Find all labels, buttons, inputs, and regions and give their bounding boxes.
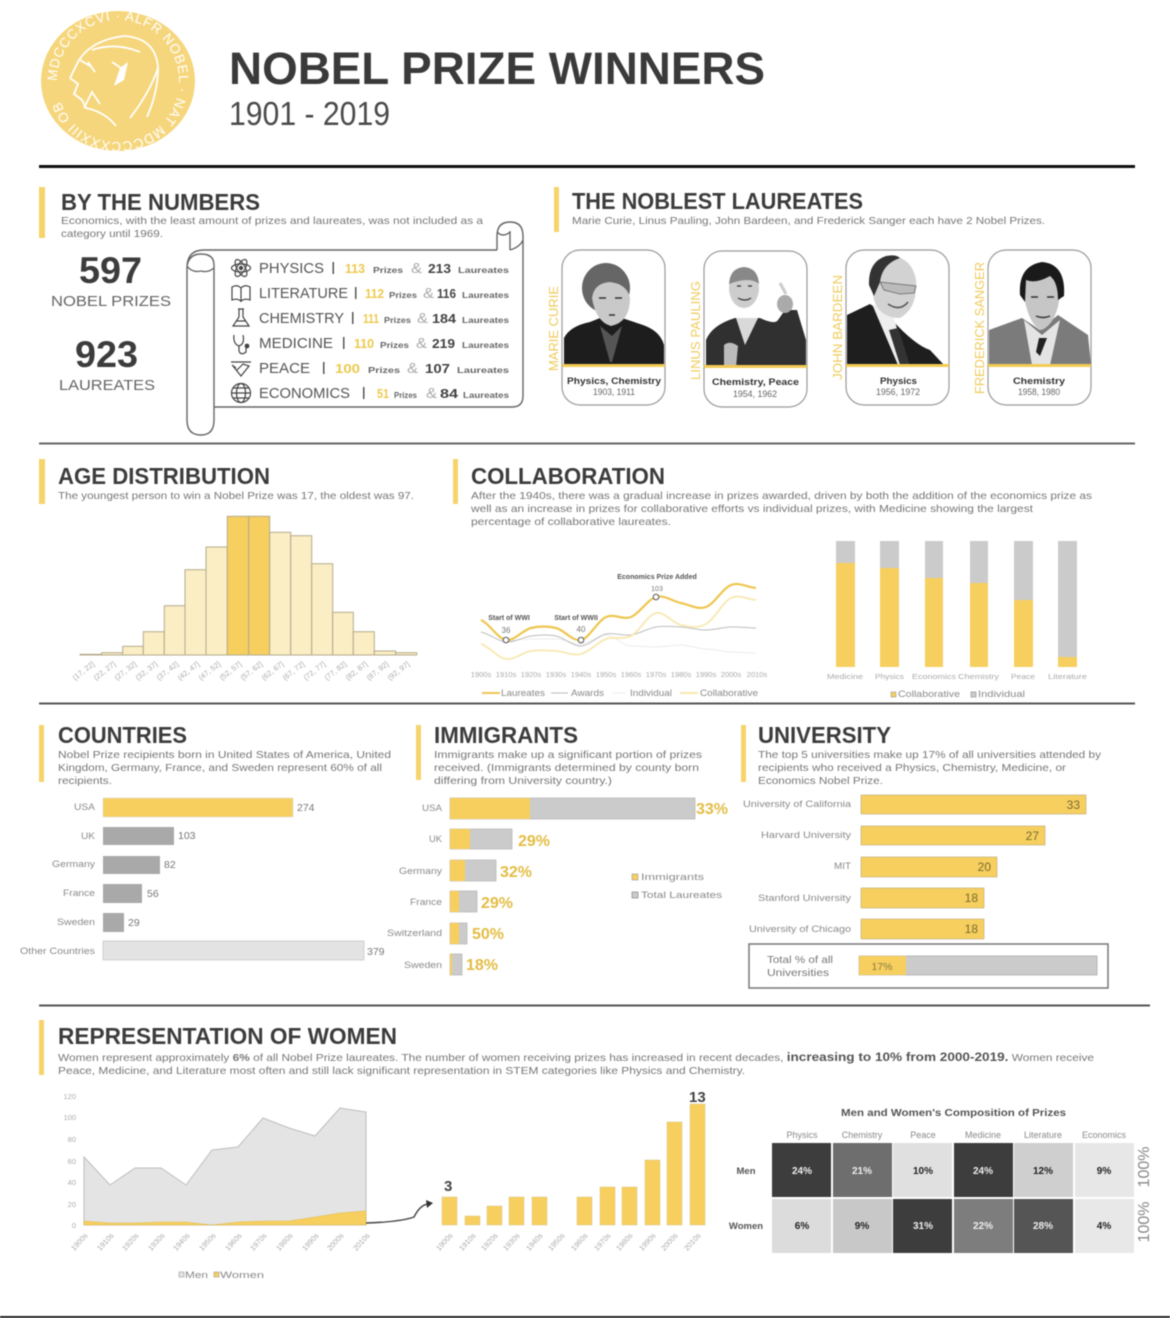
stat: 923 laureates bbox=[59, 334, 155, 394]
bar chart: universities: 18 bbox=[965, 891, 978, 905]
stacked bar chart bbox=[827, 541, 1087, 681]
arrow: area chart to bar chart bbox=[366, 1200, 433, 1223]
row: economics: & bbox=[426, 385, 437, 402]
heatmap: composition of prizes: 24% bbox=[973, 1166, 993, 1177]
stat: 597 nobel prizes: 597 bbox=[79, 250, 142, 291]
area chart: men and women by decade: 1920s bbox=[120, 1231, 141, 1253]
heatmap: composition of prizes: Physics bbox=[786, 1130, 818, 1140]
histogram: (47, 52] bbox=[197, 659, 222, 682]
line chart: 103 bbox=[651, 586, 663, 593]
row: chemistry: & bbox=[417, 310, 428, 327]
stat: 597 nobel prizes bbox=[51, 250, 171, 310]
stacked bar chart: immigrants: Sweden bbox=[404, 960, 442, 970]
category rows bbox=[231, 258, 509, 402]
legend: line chart: Laureates bbox=[501, 688, 546, 698]
heatmap: composition of prizes bbox=[729, 1108, 1153, 1253]
stacked bar chart: Medicine bbox=[827, 672, 863, 681]
histogram: (42, 47] bbox=[176, 659, 201, 682]
bar chart: countries: 103 bbox=[178, 830, 196, 842]
legend: men and women: Men bbox=[185, 1270, 208, 1280]
bar chart: women by decade: 2000s bbox=[659, 1231, 680, 1253]
heatmap: composition of prizes: 22% bbox=[973, 1221, 993, 1232]
row: peace: 107 bbox=[425, 361, 450, 376]
bar chart: countries: France bbox=[63, 888, 95, 898]
area chart: men and women by decade: 100 bbox=[63, 1113, 76, 1122]
heatmap: composition of prizes: 6% bbox=[795, 1221, 809, 1232]
area chart: men and women by decade: 0 bbox=[72, 1221, 76, 1230]
area chart: men and women by decade: 40 bbox=[68, 1178, 76, 1187]
line chart: 1910s bbox=[496, 670, 516, 679]
stacked bar chart: Physics bbox=[875, 672, 904, 681]
bar chart: women by decade: 1960s bbox=[569, 1231, 590, 1253]
heatmap: composition of prizes: Peace bbox=[910, 1130, 936, 1140]
row: physics: Laureates bbox=[458, 265, 509, 275]
bar chart: universities: 20 bbox=[978, 860, 991, 874]
bar chart: women by decade: 3 bbox=[444, 1178, 452, 1195]
bar chart: countries: 379 bbox=[367, 946, 385, 958]
legend: men and women: Women bbox=[220, 1270, 264, 1280]
text: university note bbox=[758, 749, 1102, 787]
area chart: men and women by decade: 1940s bbox=[171, 1231, 192, 1253]
row: medicine: Laureates bbox=[462, 340, 509, 350]
line chart: 1950s bbox=[596, 670, 616, 679]
card: Frederick Sanger bbox=[988, 250, 1091, 405]
legend: line chart: Individual bbox=[630, 688, 672, 698]
histogram: (37, 42] bbox=[155, 659, 180, 682]
callout: total share of universities: Total % of all bbox=[767, 954, 833, 966]
heading: countries: COUNTRIES bbox=[58, 722, 187, 748]
row: economics: Laureates bbox=[463, 390, 509, 400]
line chart: 1980s bbox=[671, 670, 691, 679]
row: literature: & bbox=[423, 285, 434, 302]
row: chemistry bbox=[233, 309, 509, 327]
row: economics: Prizes bbox=[394, 390, 417, 400]
bar chart: women by decade: 1910s bbox=[457, 1231, 478, 1253]
bar chart: countries: 29 bbox=[128, 917, 140, 929]
stacked bar chart: Peace bbox=[1011, 672, 1035, 681]
callout: total share of universities bbox=[749, 944, 1108, 988]
stacked bar chart: immigrants: France bbox=[410, 897, 442, 907]
bar chart: countries: 56 bbox=[147, 888, 159, 900]
panel: countries bbox=[20, 722, 391, 960]
row: chemistry: CHEMISTRY bbox=[259, 311, 344, 327]
card: John Bardeen: 1956, 1972 bbox=[876, 387, 920, 398]
area chart: men and women by decade: 1970s bbox=[248, 1231, 269, 1253]
area chart: men and women by decade: 20 bbox=[68, 1200, 76, 1209]
panel: the noblest laureates bbox=[547, 187, 1091, 407]
name: Linus Pauling: LINUS PAULING bbox=[689, 281, 703, 380]
text: economics note: category until 1969. bbox=[61, 228, 163, 240]
callout: total share of universities: 17% bbox=[871, 961, 893, 973]
legend: immigrants: Total Laureates bbox=[641, 890, 723, 900]
stat: 923 laureates: 923 bbox=[75, 334, 138, 375]
line chart: 2000s bbox=[721, 670, 741, 679]
heading: representation of women: REPRESENTATION OF WOMEN bbox=[58, 1023, 397, 1049]
panel: by the numbers bbox=[39, 187, 523, 435]
stacked bar chart: immigrants: 32% bbox=[500, 864, 532, 881]
text: collaboration note: After the 1940s, there was a gradual increase in prizes awarded, driven by both the addition of the economics prize as bbox=[471, 490, 1092, 502]
legend: stacked bars: Individual bbox=[978, 689, 1025, 699]
card: Marie Curie: Physics, Chemistry bbox=[567, 376, 662, 387]
heatmap: composition of prizes: Men bbox=[736, 1166, 756, 1177]
histogram: (77, 82] bbox=[323, 659, 348, 682]
text: university note: recipients who received a Physics, Chemistry, Medicine, or bbox=[758, 762, 1067, 774]
text: collaboration note: percentage of collaborative laureates. bbox=[471, 516, 671, 528]
row: medicine: MEDICINE bbox=[259, 336, 333, 352]
histogram: (92, 97] bbox=[386, 659, 411, 682]
card: Frederick Sanger: Chemistry bbox=[1013, 376, 1066, 387]
row: peace: 100 bbox=[335, 361, 360, 376]
histogram: (87, 92] bbox=[365, 659, 390, 682]
heatmap: composition of prizes: 9% bbox=[1097, 1166, 1111, 1177]
bar chart: women by decade: 1990s bbox=[637, 1231, 658, 1253]
row: medicine: 110 bbox=[354, 336, 374, 351]
area chart: men and women by decade: 1910s bbox=[95, 1231, 116, 1253]
row: peace: PEACE bbox=[259, 361, 310, 377]
heatmap: composition of prizes: 100% bbox=[1136, 1147, 1153, 1187]
heading: by the numbers: BY THE NUMBERS bbox=[61, 189, 260, 215]
line chart: 40 bbox=[577, 625, 586, 634]
stacked bar chart: immigrants: 33% bbox=[696, 801, 728, 818]
row: economics: 51 bbox=[377, 386, 389, 401]
histogram bbox=[71, 516, 417, 682]
line chart: Start of WWI bbox=[488, 615, 530, 622]
heading: noblest laureates: THE NOBLEST LAUREATES bbox=[572, 188, 863, 214]
text: collaboration note: well as an increase in prizes for collaborative efforts vs individual prizes, with Medicine showing the largest bbox=[470, 503, 1033, 515]
row: economics: 84 bbox=[440, 386, 459, 401]
stacked bar chart: immigrants: USA bbox=[422, 803, 442, 813]
row: peace: Prizes bbox=[368, 365, 400, 375]
bar chart: universities: 18 bbox=[965, 922, 978, 936]
area chart: men and women by decade: 1930s bbox=[146, 1231, 167, 1253]
heading: university: UNIVERSITY bbox=[758, 722, 891, 748]
text: countries note bbox=[58, 749, 391, 787]
heatmap: composition of prizes: 24% bbox=[792, 1166, 812, 1177]
text: immigrants note: differing from University country.) bbox=[434, 775, 612, 787]
row: physics: & bbox=[411, 260, 422, 277]
area chart: men and women by decade: 2000s bbox=[325, 1231, 346, 1253]
stacked bar chart: immigrants: 29% bbox=[518, 833, 550, 850]
row: chemistry: Prizes bbox=[384, 315, 411, 325]
bar chart: countries: Other Countries bbox=[20, 946, 96, 956]
bar chart: universities: 33 bbox=[1067, 798, 1080, 812]
bar chart: women by decade bbox=[434, 1089, 706, 1253]
area chart: men and women by decade: 1900s bbox=[69, 1231, 90, 1253]
heading: collaboration: COLLABORATION bbox=[471, 463, 665, 489]
line chart: 1920s bbox=[521, 670, 541, 679]
bar chart: women by decade: 13 bbox=[689, 1089, 706, 1106]
stacked bar chart: immigrants: 18% bbox=[466, 957, 498, 974]
card: Frederick Sanger: 1958, 1980 bbox=[1018, 387, 1060, 398]
area chart: men and women by decade: 120 bbox=[63, 1092, 76, 1101]
heatmap: composition of prizes: 31% bbox=[913, 1221, 933, 1232]
line chart: Start of WWII bbox=[554, 615, 598, 622]
row: physics: Prizes bbox=[373, 265, 403, 275]
text: women note bbox=[58, 1050, 1094, 1077]
row: chemistry: 184 bbox=[432, 311, 457, 326]
row: physics: 113 bbox=[345, 261, 365, 276]
bar chart: universities: MIT bbox=[834, 861, 852, 871]
row: literature: Laureates bbox=[462, 290, 509, 300]
row: chemistry: 111 bbox=[363, 311, 379, 326]
bar chart: countries: Germany bbox=[52, 859, 96, 869]
legend: stacked bars: Collaborative bbox=[898, 689, 960, 699]
text: age note: The youngest person to win a Nobel Prize was 17, the oldest was 97. bbox=[58, 490, 414, 502]
line chart: 2010s bbox=[747, 670, 767, 679]
row: peace: & bbox=[407, 360, 418, 377]
bar chart: women by decade: 1900s bbox=[434, 1231, 455, 1253]
bar chart: countries bbox=[20, 798, 385, 960]
heatmap: composition of prizes: 28% bbox=[1033, 1221, 1053, 1232]
scroll frame bbox=[187, 222, 523, 435]
row: physics: PHYSICS bbox=[259, 261, 324, 277]
text: laureates note: Marie Curie, Linus Pauling, John Bardeen, and Frederick Sanger each have 2 Nobel Prizes. bbox=[572, 215, 1045, 227]
row: economics bbox=[232, 384, 509, 402]
panel: university bbox=[741, 722, 1108, 988]
text: women note: Women represent approximately 6% of all Nobel Prize laureates. The number of women receiving prizes has increased in recent decades, increasing to 10% from 2000-2019. Women receive bbox=[58, 1050, 1094, 1064]
area chart: men and women by decade: 1960s bbox=[223, 1231, 244, 1253]
card: Linus Pauling: 1954, 1962 bbox=[733, 389, 777, 400]
legend: line chart: Awards bbox=[571, 688, 605, 698]
text: immigrants note: received. (Immigrants determined by county born bbox=[434, 762, 699, 774]
heatmap: composition of prizes: 100% bbox=[1136, 1202, 1153, 1242]
histogram: (32, 37] bbox=[134, 659, 159, 682]
heading: age distribution: AGE DISTRIBUTION bbox=[58, 463, 270, 489]
bar chart: women by decade: 1950s bbox=[546, 1231, 567, 1253]
bar chart: countries: 82 bbox=[164, 859, 176, 871]
bar chart: countries: Sweden bbox=[57, 917, 95, 927]
area chart: men and women by decade bbox=[63, 1092, 372, 1253]
card: John Bardeen bbox=[846, 250, 949, 405]
text: immigrants note: Immigrants make up a significant portion of prizes bbox=[434, 749, 702, 761]
legend: line chart: Collaborative bbox=[700, 688, 758, 698]
panel: age distribution bbox=[39, 459, 417, 682]
legend: stacked bars bbox=[891, 689, 1025, 699]
stacked bar chart: Chemistry bbox=[958, 672, 999, 681]
text: collaboration note bbox=[470, 490, 1092, 528]
legend: immigrants: Immigrants bbox=[641, 872, 705, 882]
name: Frederick Sanger: FREDERICK SANGER bbox=[973, 262, 987, 394]
bar chart: universities: University of Chicago bbox=[749, 924, 851, 934]
text: university note: The top 5 universities make up 17% of all universities attended by bbox=[758, 749, 1102, 761]
row: physics bbox=[232, 258, 509, 278]
area chart: men and women by decade: 1950s bbox=[197, 1231, 218, 1253]
callout: total share of universities: Universities bbox=[767, 967, 829, 979]
line chart: 1970s bbox=[646, 670, 666, 679]
row: medicine: & bbox=[416, 335, 427, 352]
heatmap: composition of prizes: Men and Women's Composition of Prizes bbox=[841, 1108, 1066, 1119]
heatmap: composition of prizes: Economics bbox=[1082, 1130, 1127, 1140]
row: peace: Laureates bbox=[457, 365, 509, 375]
row: peace bbox=[231, 360, 509, 377]
text: countries note: Nobel Prize recipients born in United States of America, United bbox=[58, 749, 391, 761]
icon: Nobel medal: MDCCCXCVI · ALFR NOBEL · NAT MDCCCXXXIII OB bbox=[47, 11, 189, 152]
name: Marie Curie: MARIE CURIE bbox=[547, 286, 561, 371]
title: NOBEL PRIZE WINNERS bbox=[229, 43, 765, 94]
line chart: 1900s bbox=[471, 670, 491, 679]
stacked bar chart: Economics bbox=[912, 672, 956, 681]
stacked bar chart: Literature bbox=[1048, 672, 1087, 681]
text: university note: Economics Nobel Prize. bbox=[758, 775, 883, 787]
heatmap: composition of prizes: 4% bbox=[1097, 1221, 1111, 1232]
bar chart: countries: 274 bbox=[297, 802, 315, 814]
card: John Bardeen: Physics bbox=[880, 376, 917, 387]
card: Marie Curie bbox=[562, 250, 665, 405]
stat: 597 nobel prizes: NOBEL PRIZES bbox=[51, 293, 171, 310]
bar chart: universities bbox=[743, 795, 1086, 939]
area chart: men and women by decade: 1990s bbox=[300, 1231, 321, 1253]
row: medicine: Prizes bbox=[380, 340, 409, 350]
stacked bar chart: immigrants: 50% bbox=[472, 926, 504, 943]
bar chart: countries: USA bbox=[74, 802, 95, 812]
card: Linus Pauling bbox=[704, 251, 807, 407]
stacked bar chart: immigrants: Germany bbox=[399, 866, 443, 876]
text: countries note: recipients. bbox=[58, 775, 112, 787]
legend: men and women bbox=[179, 1270, 264, 1280]
line chart: Economics Prize Added bbox=[617, 574, 697, 581]
heatmap: composition of prizes: 21% bbox=[852, 1166, 872, 1177]
bar chart: women by decade: 1930s bbox=[501, 1231, 522, 1253]
stacked bar chart: immigrants bbox=[387, 798, 728, 975]
histogram: (17, 22] bbox=[71, 659, 96, 682]
bar chart: women by decade: 2010s bbox=[682, 1231, 703, 1253]
heatmap: composition of prizes: Medicine bbox=[965, 1130, 1001, 1140]
row: literature bbox=[232, 285, 509, 302]
text: women note: Peace, Medicine, and Literature most often and still lack significant representation in STEM categories like Physics and Chemistry. bbox=[58, 1065, 745, 1077]
line chart: 36 bbox=[502, 626, 511, 635]
heatmap: composition of prizes: Women bbox=[729, 1221, 763, 1232]
bar chart: universities: Stanford University bbox=[758, 893, 852, 903]
histogram: (27, 32] bbox=[113, 659, 138, 682]
histogram: (22, 27] bbox=[92, 659, 117, 682]
histogram: (52, 57] bbox=[218, 659, 243, 682]
histogram: (67, 72] bbox=[281, 659, 306, 682]
text: economics note bbox=[61, 215, 483, 240]
card: Linus Pauling: Chemistry, Peace bbox=[712, 377, 799, 388]
line chart: 1960s bbox=[621, 670, 641, 679]
line chart: 1930s bbox=[546, 670, 566, 679]
row: literature: 116 bbox=[437, 286, 456, 301]
legend: immigrants bbox=[632, 872, 723, 900]
heatmap: composition of prizes: Literature bbox=[1024, 1130, 1062, 1140]
card: Marie Curie: 1903, 1911 bbox=[593, 387, 635, 398]
heatmap: composition of prizes: 9% bbox=[855, 1221, 869, 1232]
area chart: men and women by decade: 2010s bbox=[351, 1231, 372, 1253]
stacked bar chart: immigrants: Switzerland bbox=[387, 928, 442, 938]
row: literature: 112 bbox=[365, 286, 384, 301]
stacked bar chart: immigrants: UK bbox=[429, 834, 442, 844]
panel: collaboration bbox=[453, 459, 1092, 699]
bar chart: universities: University of California bbox=[743, 799, 851, 809]
text: economics note: Economics, with the least amount of prizes and laureates, was not included as a bbox=[61, 215, 483, 227]
bar chart: women by decade: 1940s bbox=[524, 1231, 545, 1253]
heatmap: composition of prizes: Chemistry bbox=[842, 1130, 883, 1140]
line chart bbox=[471, 574, 767, 679]
area chart: men and women by decade: 80 bbox=[68, 1135, 76, 1144]
heatmap: composition of prizes: 10% bbox=[913, 1166, 933, 1177]
histogram: (72, 77] bbox=[302, 659, 327, 682]
name: John Bardeen: JOHN BARDEEN bbox=[831, 275, 845, 380]
histogram: (62, 67] bbox=[260, 659, 285, 682]
line chart: 1990s bbox=[696, 670, 716, 679]
panel: representation of women bbox=[39, 1020, 1153, 1280]
area chart: men and women by decade: 60 bbox=[68, 1157, 76, 1166]
bar chart: women by decade: 1980s bbox=[614, 1231, 635, 1253]
text: immigrants note bbox=[434, 749, 702, 787]
bar chart: universities: 27 bbox=[1026, 829, 1039, 843]
panel: immigrants bbox=[387, 722, 728, 975]
row: literature: Prizes bbox=[389, 290, 417, 300]
histogram: (82, 87] bbox=[344, 659, 369, 682]
row: medicine bbox=[234, 335, 509, 354]
row: physics: 213 bbox=[428, 261, 451, 276]
row: literature: LITERATURE bbox=[259, 286, 348, 302]
stacked bar chart: immigrants: 29% bbox=[481, 895, 513, 912]
bar chart: universities: Harvard University bbox=[761, 830, 852, 840]
area chart: men and women by decade: 1980s bbox=[274, 1231, 295, 1253]
stat: 923 laureates: LAUREATES bbox=[59, 377, 155, 394]
text: countries note: Kingdom, Germany, France, and Sweden represent 60% of all bbox=[58, 762, 382, 774]
histogram: (57, 62] bbox=[239, 659, 264, 682]
legend: line chart bbox=[482, 688, 758, 698]
line chart: 1940s bbox=[571, 670, 591, 679]
row: chemistry: Laureates bbox=[462, 315, 509, 325]
bar chart: women by decade: 1920s bbox=[479, 1231, 500, 1253]
row: medicine: 219 bbox=[432, 336, 455, 351]
subtitle: years: 1901 - 2019 bbox=[229, 95, 390, 132]
bar chart: women by decade: 1970s bbox=[592, 1231, 613, 1253]
row: economics: ECONOMICS bbox=[259, 386, 350, 402]
heatmap: composition of prizes: 12% bbox=[1033, 1166, 1053, 1177]
heading: immigrants: IMMIGRANTS bbox=[434, 722, 578, 748]
bar chart: countries: UK bbox=[81, 831, 95, 841]
